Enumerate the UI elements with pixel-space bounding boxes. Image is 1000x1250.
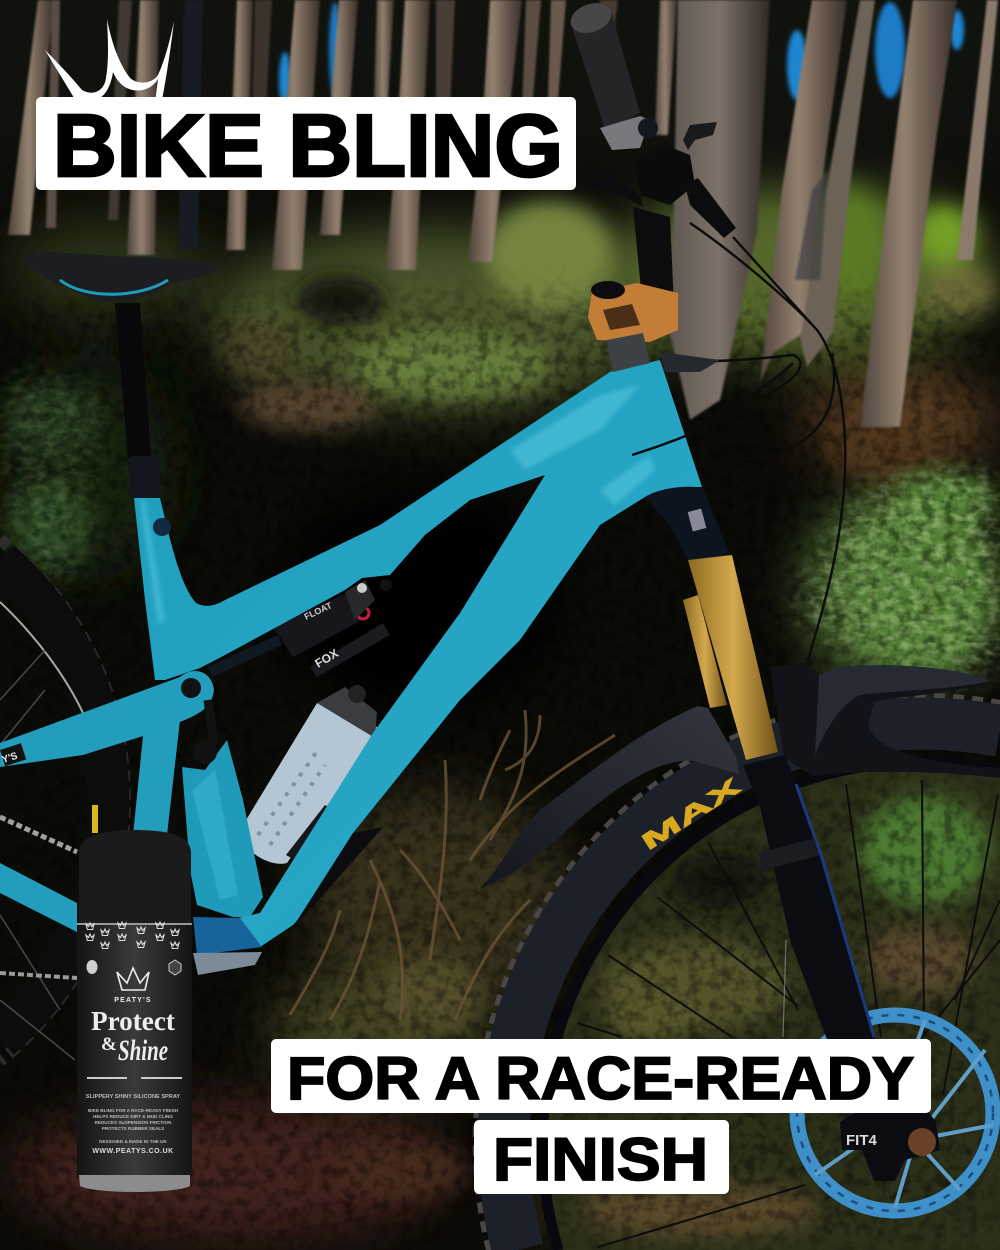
front stanchion: [688, 555, 778, 760]
frame label: [0, 743, 26, 766]
gold stem: [588, 283, 678, 342]
product: spray can: [77, 830, 192, 1192]
product: spray can: Shine: [118, 1034, 168, 1067]
front tyre: [479, 699, 1000, 1250]
seat stay strut: [133, 720, 180, 835]
left fern foliage: [0, 367, 110, 592]
fork brand: FIT4: [846, 1132, 877, 1149]
front arch and rear fender: [770, 663, 1000, 778]
handlebar riser: [633, 207, 674, 310]
front wheel inner view: [547, 767, 1000, 1250]
frame label: Y'S: [1, 751, 19, 766]
tree trunks: [8, 0, 998, 427]
rear chain: [0, 805, 98, 978]
seat post: [115, 303, 159, 498]
leaf and soil texture: [0, 300, 1000, 1250]
down tube shield: [293, 827, 383, 927]
can icon: nut: [86, 960, 98, 974]
crown logo on can: [117, 968, 149, 990]
product: spray can: REDUCES SUSPENSION FRICTION: [95, 1120, 172, 1125]
headset spacer: [607, 333, 650, 372]
front suspension fork: [645, 487, 940, 1181]
brake lever body: [660, 352, 720, 372]
tagline line 1: FOR A RACE-READY: [287, 1045, 914, 1112]
bottom bracket and pedal: [193, 917, 262, 955]
wheel spokes: [577, 780, 1000, 1247]
swingarm: [0, 671, 214, 767]
can url: WWW.PEATYS.CO.UK: [92, 1148, 174, 1155]
front hub: [908, 1128, 936, 1156]
can description: SLIPPERY SHINY SILICONE SPRAY: [86, 1094, 180, 1100]
can divider: [87, 1077, 182, 1079]
crown logo: [45, 19, 174, 111]
seat tube logo: [153, 518, 171, 536]
dry grass stalks: [290, 710, 615, 1020]
frame highlights: [140, 385, 655, 625]
dark upper forest: [0, 0, 1000, 210]
rear link and lower seat tube: [182, 740, 263, 917]
tagline line 2: FINISH: [493, 1126, 708, 1193]
brand: PEATY'S: [114, 997, 152, 1004]
rear shock: [210, 580, 390, 677]
wheel ground texture: [547, 767, 1000, 1250]
front disc rotor: [797, 1015, 993, 1211]
rear wheel: [0, 539, 125, 1061]
right bracken foliage: [800, 470, 1000, 673]
product name: Protect: [91, 1006, 175, 1036]
water bottle: [240, 685, 377, 864]
front tyre fender: [479, 706, 739, 889]
rear stanchion: [683, 595, 727, 708]
can cap: [79, 830, 191, 925]
bike frame: [0, 360, 702, 975]
rear shock: FLOAT: [303, 600, 334, 622]
can base: [79, 1175, 190, 1192]
can features: BIKE BLING FOR A RACE-READY FINISH: [88, 1108, 179, 1113]
lower fork leg: [743, 755, 940, 1181]
pivot bolts: [181, 678, 201, 698]
fork crown: [645, 487, 730, 560]
handlebar and stem: [566, 0, 845, 660]
blue sky gaps: [279, 2, 964, 108]
can icon: carbon hexagon: [169, 960, 181, 975]
title: Bike Bling: BIKE BLING: [53, 96, 563, 195]
tyre brand text: MAX: [637, 772, 746, 855]
product: spray can: HELPS REDUCE DIRT & MUD CLING: [93, 1114, 173, 1119]
product: spray can: &: [101, 1034, 117, 1055]
shock brand: FOX: [312, 646, 341, 671]
can body: [77, 924, 192, 1177]
product: spray can: DESIGNED & MADE IN THE UK: [99, 1139, 167, 1144]
handlebar grip: [571, 8, 640, 132]
chainstay: [0, 863, 77, 932]
tagline line 2: [474, 1120, 729, 1194]
product: spray can: PROTECTS RUBBER SEALS: [102, 1126, 164, 1131]
saddle: [23, 252, 219, 302]
can label pattern: [86, 922, 179, 948]
main frame: [134, 360, 702, 947]
brake lever and controls: [587, 160, 643, 207]
brake cables: [632, 223, 845, 660]
